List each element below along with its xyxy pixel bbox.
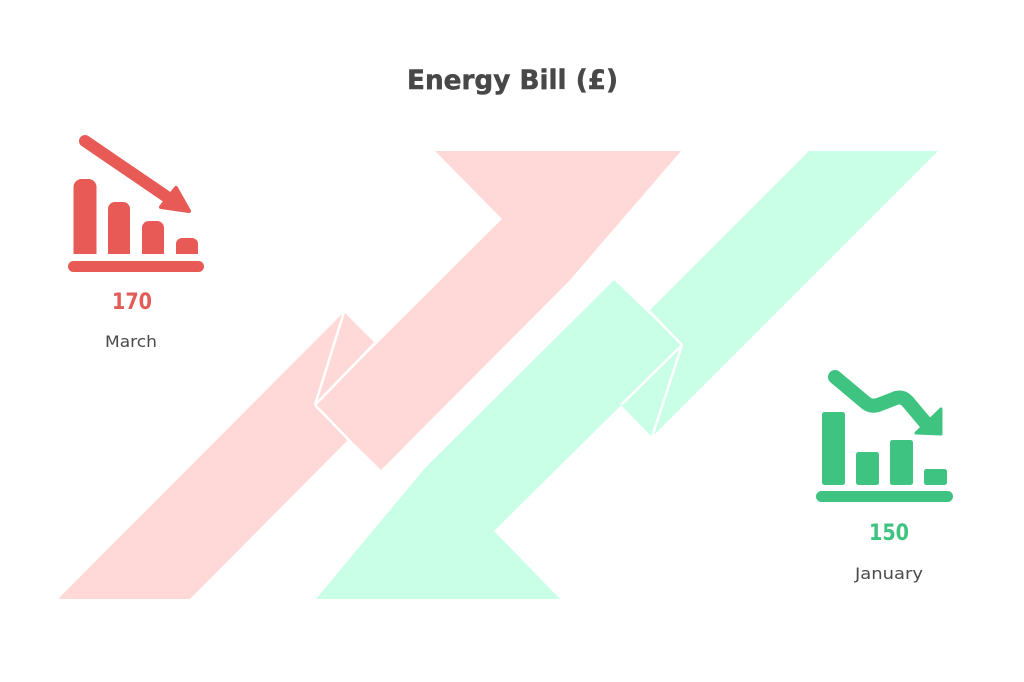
pink arrow: March bbox=[58, 151, 681, 599]
label: March: March bbox=[105, 332, 157, 351]
icon: green fluctuating bar chart bbox=[816, 377, 953, 502]
label: January: January bbox=[854, 564, 923, 583]
icon: red declining bar chart bbox=[68, 141, 204, 272]
value: 150: 150 bbox=[869, 521, 909, 546]
value: 170: 170 bbox=[112, 290, 152, 315]
title: Energy Bill (£) bbox=[407, 65, 618, 96]
green arrow: January bbox=[316, 151, 938, 599]
